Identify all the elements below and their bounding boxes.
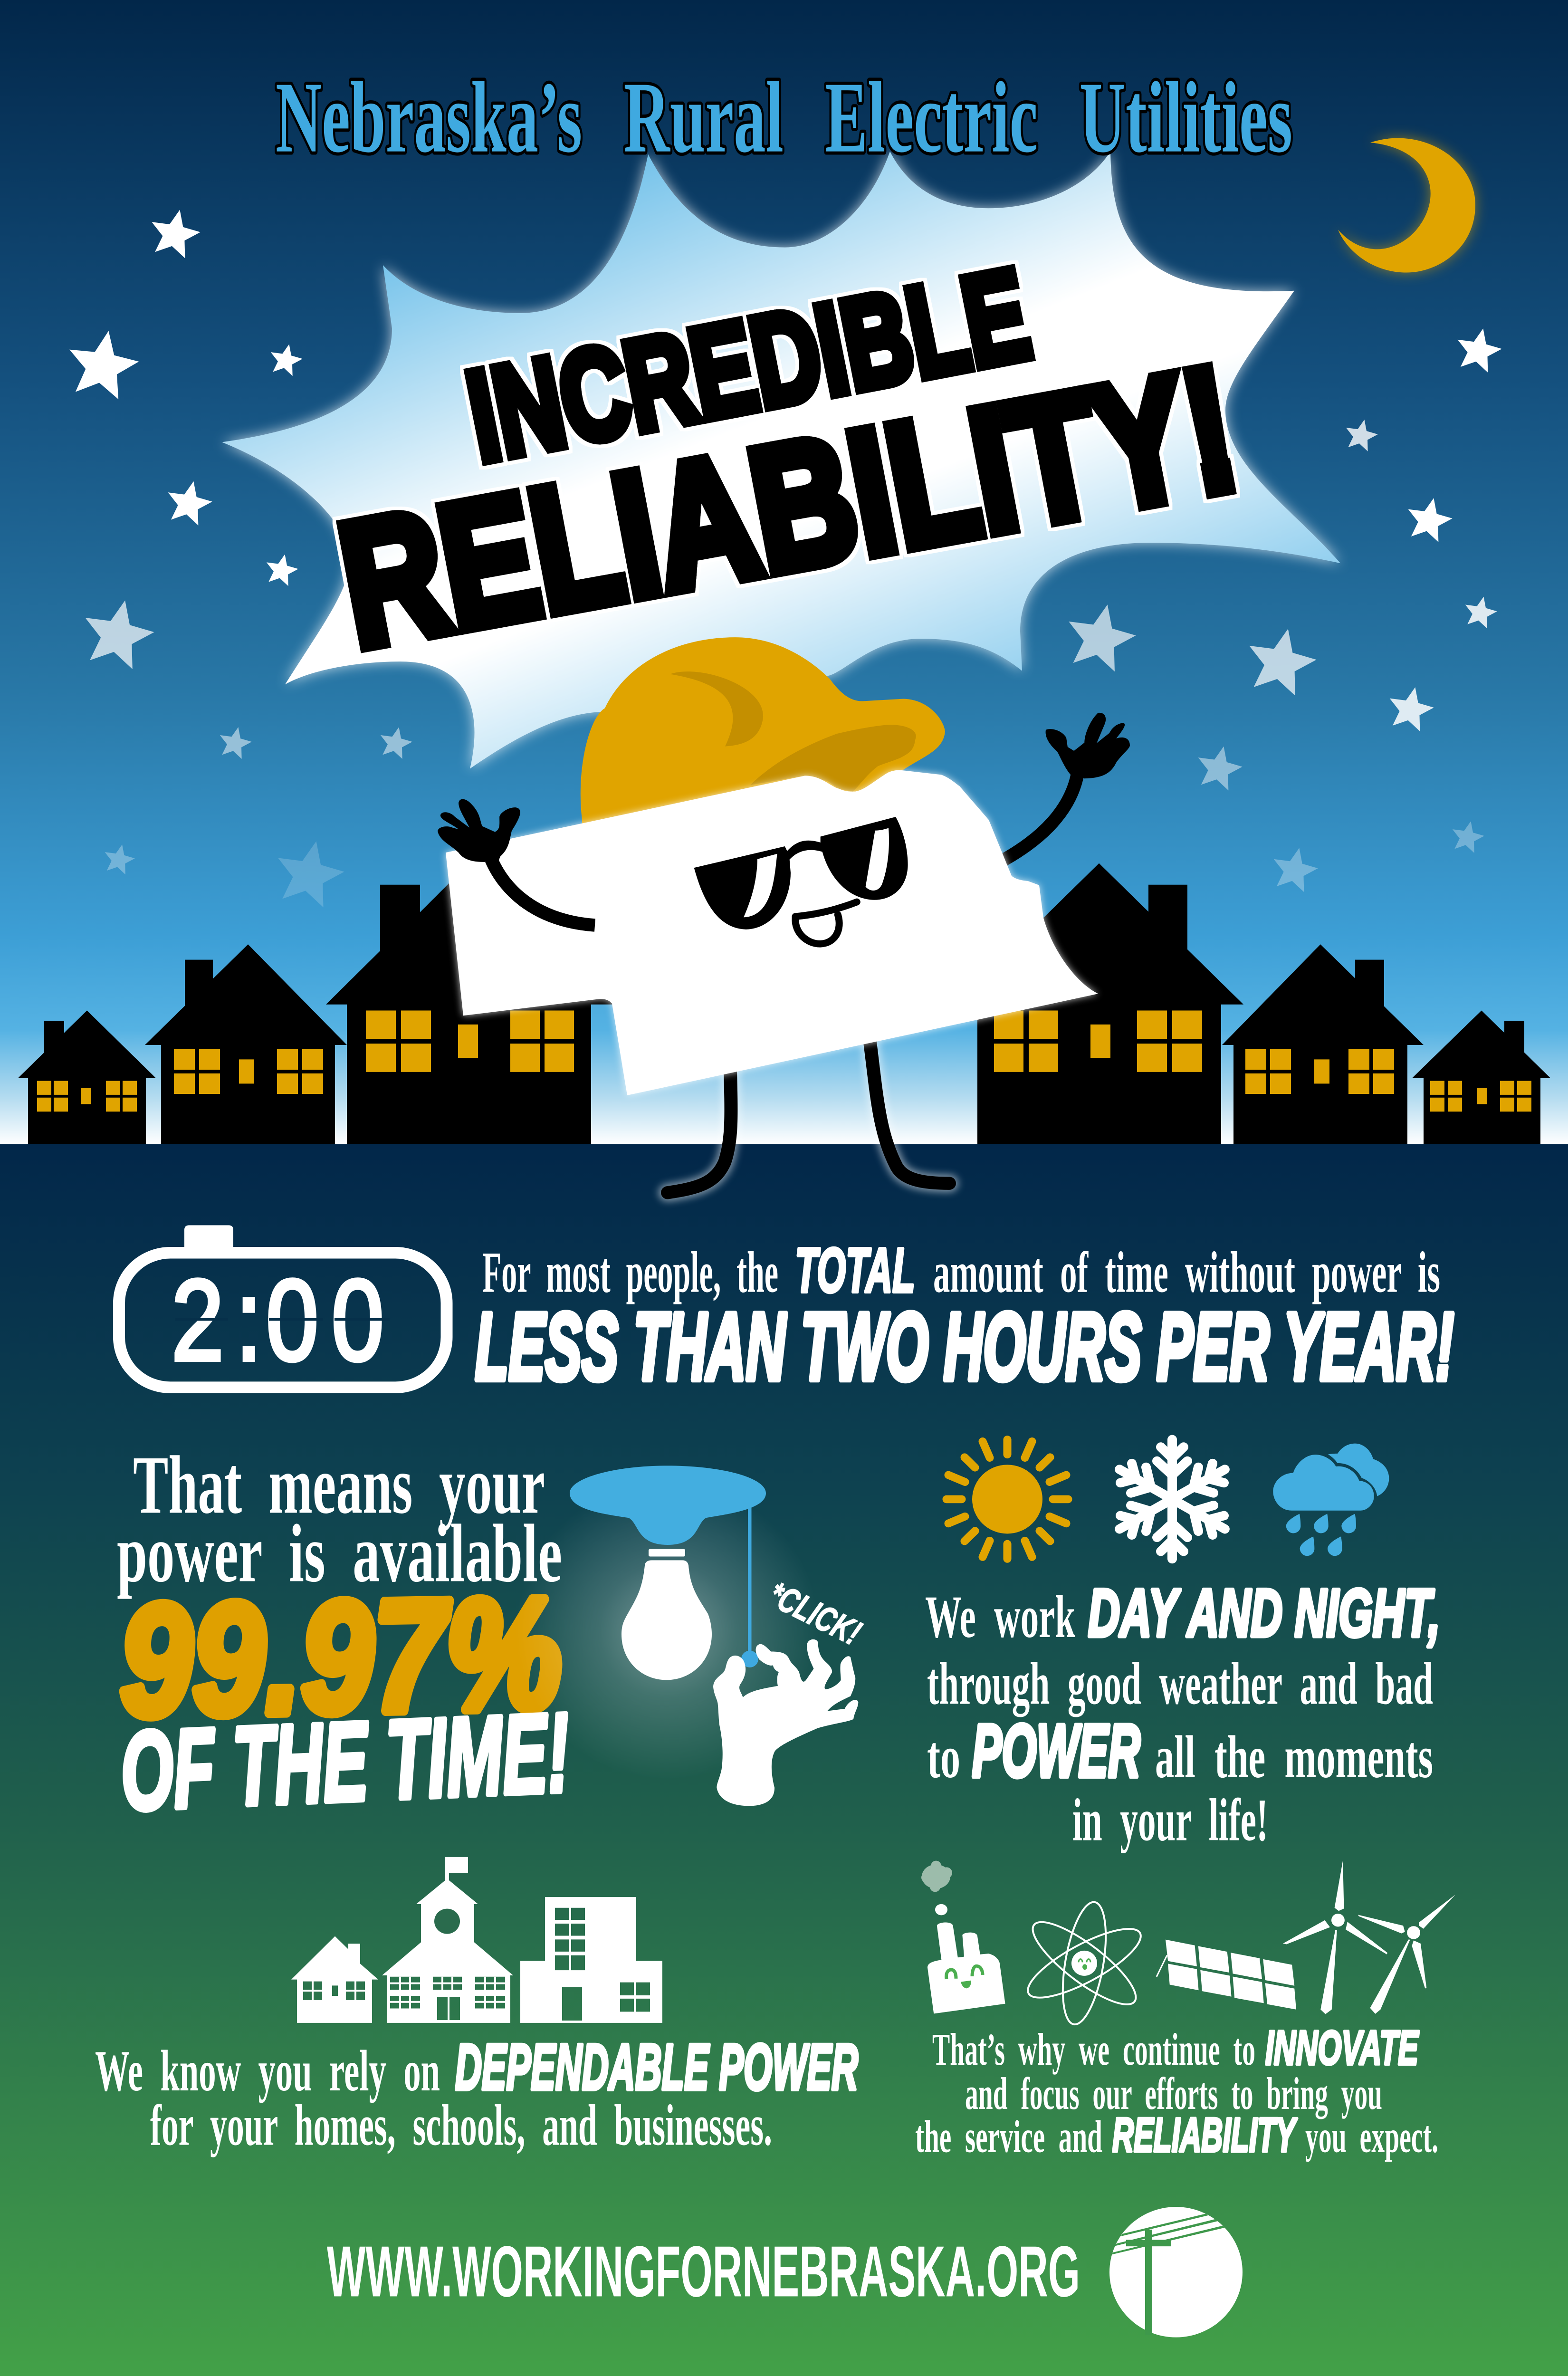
ceiling fixture: [570, 1466, 766, 1545]
statement: continue to innovate: INNOVATE: [1265, 2021, 1419, 2075]
body: [446, 770, 1098, 1095]
socket: [649, 1549, 685, 1556]
icon: factory: [921, 1861, 1005, 2014]
clock digits: 2:00: [172, 1256, 384, 1384]
icon: solar panel: [1157, 1940, 1296, 2010]
sunglasses: [694, 817, 908, 929]
stars: [62, 205, 1505, 910]
statement: continue to innovate: the service and: [915, 2111, 1102, 2162]
alarm clock: [119, 1225, 447, 1388]
logo: power pole: [1109, 2207, 1243, 2338]
statement: dependable power: We know you rely on: [95, 2039, 440, 2103]
statement: total time without power: [475, 1236, 1454, 1400]
house: medium left: [145, 944, 347, 1144]
legs: [668, 1042, 949, 1193]
icon: rain cloud: [1273, 1444, 1389, 1556]
pull cord: [741, 1506, 758, 1667]
office: [520, 1897, 662, 2023]
sky background: [0, 0, 1568, 1144]
icon: hand: [713, 1639, 858, 1806]
house: small left: [18, 1010, 156, 1144]
icon: wind turbines: [1283, 1860, 1455, 2014]
icon: atom: [1019, 1899, 1149, 2027]
right arm and hand: [1000, 713, 1130, 862]
bulb: [621, 1560, 712, 1680]
houses: [18, 863, 1550, 1144]
mascot: Nebraska character: [438, 637, 1130, 1193]
statement: day and night: to: [927, 1723, 960, 1791]
clock face: [119, 1253, 447, 1388]
smile and tongue: [795, 902, 857, 944]
statement: total time without power: For most people, the: [482, 1240, 778, 1304]
statement: 99.97% availability: That means your: [133, 1439, 545, 1531]
house: large right: [955, 863, 1243, 1144]
icon: home, school and office: [291, 1857, 662, 2023]
comic burst: [222, 152, 1340, 769]
house: medium right: [1222, 944, 1424, 1144]
statement: 99.97% availability: [117, 1439, 572, 1834]
headline: RELIABILITY!: [326, 329, 1251, 684]
statement: total time without power: TOTAL: [795, 1236, 915, 1305]
statement: continue to innovate: That’s why we continue to: [932, 2024, 1255, 2075]
statement: dependable power: DEPENDABLE POWER: [455, 2031, 858, 2104]
statement: 99.97% availability: power is available: [117, 1508, 562, 1600]
icon: snowflake: [1112, 1439, 1233, 1559]
hard hat: [581, 637, 945, 839]
building windows and doors: [303, 1908, 650, 2021]
statement: continue to innovate: RELIABILITY: [1112, 2108, 1298, 2162]
statement: continue to innovate: [915, 2021, 1438, 2162]
icon: light bulb with pull cord: [516, 1466, 820, 1780]
statement: 99.97% availability: 99.97%: [118, 1565, 563, 1749]
home: [291, 1936, 378, 2023]
left arm and hand: [438, 799, 595, 925]
icon: sun: [947, 1439, 1068, 1559]
statement: dependable power: [95, 2031, 858, 2157]
statement: day and night: in your life!: [1072, 1786, 1268, 1853]
statement: day and night: POWER: [972, 1709, 1140, 1792]
ground and lower background: [0, 1144, 1568, 2376]
school: [382, 1857, 513, 2023]
headline: INCREDIBLE: [457, 241, 1040, 488]
house: large left: [326, 863, 613, 1144]
statement: day and night: We work: [925, 1583, 1075, 1650]
statement: dependable power: for your homes, schools, and businesses.: [150, 2093, 772, 2157]
statement: day and night: [925, 1575, 1440, 1853]
statement: continue to innovate: you expect.: [1305, 2111, 1438, 2162]
house: small right: [1412, 1010, 1550, 1144]
crescent moon: [1338, 138, 1475, 273]
clock button: [184, 1225, 233, 1248]
statement: 99.97% availability: OF THE TIME!: [118, 1690, 572, 1834]
click label: *CLICK!: [763, 1574, 868, 1653]
